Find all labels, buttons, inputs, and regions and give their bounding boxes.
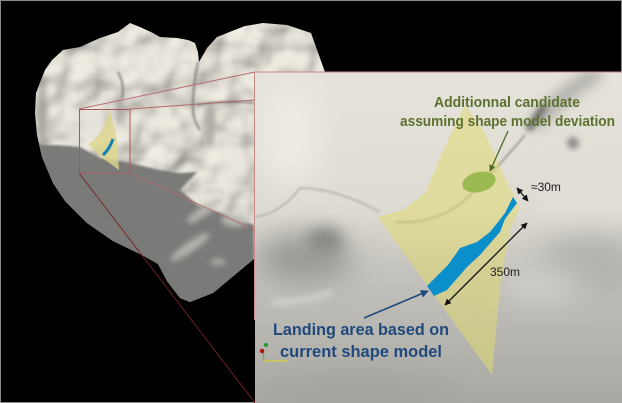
red zoom connector lines [79,72,255,403]
label: landing area: Landing area based on [273,320,449,339]
arrow to candidate ellipse [490,131,508,171]
label: width 30 m: ≈30m [531,180,561,194]
small landing ellipse sector on comet [88,109,119,170]
axes triad [260,343,287,361]
label: current shape model: current shape model [280,342,442,361]
width arrow [517,188,528,201]
blue landing area [427,197,517,296]
comet nucleus [35,23,325,302]
zoom source box [80,110,130,173]
green candidate ellipse [462,172,496,192]
inset border [254,72,622,320]
yellow candidate sector [378,105,520,375]
label: length 350 m: 350m [490,265,520,279]
arrow to landing area [364,291,428,318]
shadowed lower half [39,144,254,302]
terrain shading [255,72,622,306]
length arrow [445,223,527,305]
inset panel: zoomed terrain [255,72,622,403]
label: additional candidate: Additionnal candidate [434,94,580,111]
